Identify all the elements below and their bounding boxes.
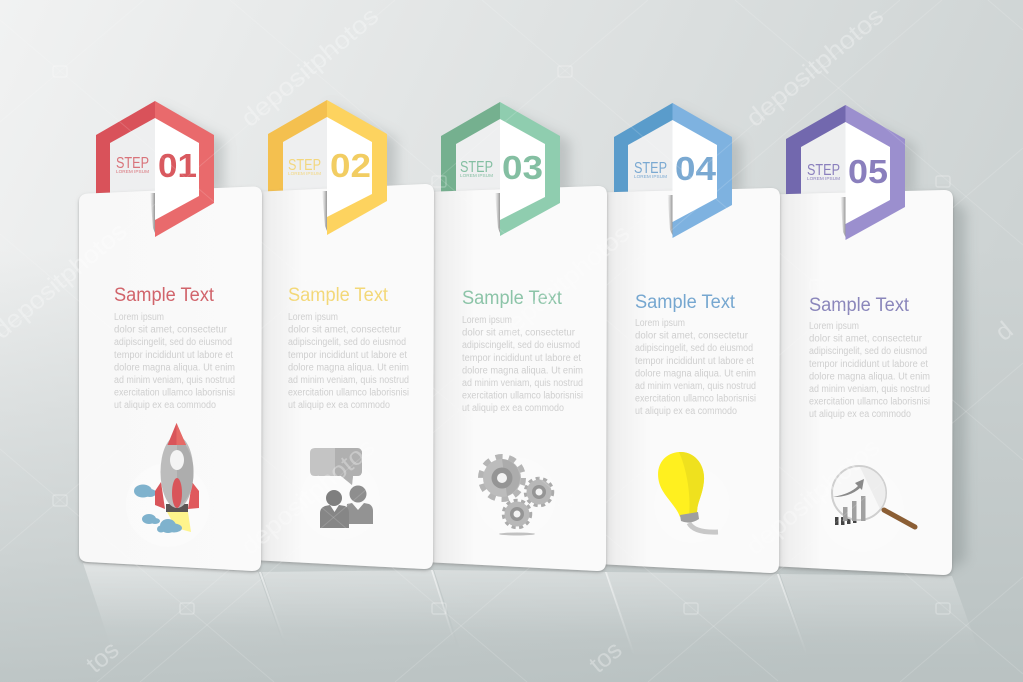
hexagon front half [327, 100, 387, 235]
watermark: tos [81, 636, 124, 679]
body text: ut aliquip ex ea commodo [288, 400, 390, 411]
step label: LOREM IPSUM [634, 174, 667, 179]
step label: STEP [116, 155, 149, 172]
watermark: depositphotos [741, 433, 885, 561]
step label: STEP [634, 160, 667, 177]
body text: exercitation ullamco laborisnisi [288, 388, 409, 398]
body text: adipiscingelit, sed do eiusmod [288, 337, 406, 348]
card [597, 188, 780, 573]
body text [288, 312, 409, 411]
step label: LOREM IPSUM [116, 169, 149, 174]
body text: dolor sit amet, consectetur [462, 328, 576, 338]
body text [114, 312, 235, 411]
step label: STEP [288, 157, 321, 174]
watermark: depositphotos [236, 2, 384, 133]
body text: tempor incididunt ut labore et [288, 350, 407, 361]
body text: Lorem ipsum [809, 321, 859, 332]
hexagon shadow [840, 110, 915, 195]
fold shadow [322, 191, 327, 231]
hexagon shadow [322, 105, 397, 192]
body text: exercitation ullamco laborisnisi [462, 390, 583, 402]
body text: Lorem ipsum [462, 315, 512, 326]
fold shadow [150, 193, 155, 233]
body text: ut aliquip ex ea commodo [462, 403, 564, 414]
panel: step 2 [252, 100, 434, 569]
heading: Sample Text [288, 285, 389, 306]
heading: Sample Text [114, 285, 215, 306]
body text: Lorem ipsum [114, 312, 164, 323]
hexagon shadow [150, 106, 224, 193]
step number: 05 [848, 153, 888, 190]
step label: LOREM IPSUM [460, 173, 493, 178]
panel: step 5 [770, 105, 966, 575]
body text: tempor incididunt ut labore et [635, 356, 754, 367]
body text: dolor sit amet, consectetur [114, 324, 228, 336]
body text: ad minim veniam, quis nostrud [462, 378, 583, 389]
body text: Lorem ipsum [635, 318, 685, 329]
hexagon back half [441, 102, 500, 193]
body text: ad minim veniam, quis nostrud [809, 384, 930, 395]
fold shadow [668, 195, 672, 235]
hexagon front half [672, 103, 732, 238]
body text: adipiscingelit, sed do eiusmod [462, 340, 580, 351]
card [770, 190, 953, 575]
step label: LOREM IPSUM [807, 176, 840, 181]
step label: STEP [807, 162, 840, 179]
body text: dolore magna aliqua. Ut enim [288, 362, 409, 374]
step number: 03 [502, 149, 543, 186]
body text: ut aliquip ex ea commodo [809, 409, 911, 420]
body text: dolore magna aliqua. Ut enim [462, 366, 583, 376]
step label: LOREM IPSUM [288, 171, 321, 176]
watermark: depositphotos [236, 433, 380, 561]
body text: dolor sit amet, consectetur [288, 324, 402, 336]
heading: Sample Text [635, 292, 736, 313]
heading: Sample Text [809, 295, 910, 316]
body text: ad minim veniam, quis nostrud [288, 375, 409, 386]
body text: dolore magna aliqua. Ut enim [635, 368, 756, 380]
body text: dolore magna aliqua. Ut enim [809, 372, 930, 382]
panel: step 3 [424, 102, 607, 571]
floor reflections [83, 563, 982, 660]
icon: light bulb [654, 452, 730, 543]
body text: exercitation ullamco laborisnisi [809, 396, 930, 408]
icon: people with speech bubble [300, 448, 380, 540]
step number: 04 [675, 150, 717, 187]
hexagon front half [155, 101, 214, 237]
step number: 02 [330, 147, 371, 184]
body text: dolor sit amet, consectetur [809, 334, 923, 344]
card [79, 186, 262, 571]
hexagon back half [614, 103, 672, 195]
body text: dolor sit amet, consectetur [635, 330, 749, 342]
watermark: tos [584, 636, 627, 679]
body text: exercitation ullamco laborisnisi [635, 394, 756, 404]
icon: gears [476, 457, 556, 537]
heading: Sample Text [462, 288, 563, 309]
watermark: depositphotos [491, 219, 635, 347]
panel: step 4 [597, 103, 780, 573]
hexagon back half [786, 105, 846, 197]
card [252, 184, 434, 569]
icon: magnifier chart [820, 466, 915, 552]
card [424, 186, 607, 571]
hexagon shadow [495, 107, 570, 195]
body text: dolore magna aliqua. Ut enim [114, 362, 235, 374]
body text: tempor incididunt ut labore et [809, 359, 928, 370]
body text [809, 321, 930, 420]
panel: step 1 [79, 101, 262, 571]
card shadow [790, 196, 966, 570]
body text [635, 318, 756, 417]
fold shadow [495, 193, 500, 233]
body text: ut aliquip ex ea commodo [114, 400, 216, 411]
body text: exercitation ullamco laborisnisi [114, 388, 235, 398]
step number: 01 [158, 147, 197, 184]
body text: adipiscingelit, sed do eiusmod [635, 343, 753, 354]
floor shading [0, 250, 1023, 682]
hexagon back half [96, 101, 155, 194]
hexagon back half [268, 100, 327, 192]
hexagon front half [500, 102, 560, 236]
watermark: d [990, 316, 1019, 347]
body text: ad minim veniam, quis nostrud [114, 375, 235, 386]
fold shadow [840, 197, 846, 237]
body text: adipiscingelit, sed do eiusmod [809, 346, 927, 357]
icon: rocket [126, 423, 210, 547]
body text: Lorem ipsum [288, 312, 338, 323]
body text: adipiscingelit, sed do eiusmod [114, 337, 232, 348]
watermark: depositphotos [741, 2, 889, 133]
hexagon front half [846, 105, 905, 240]
body text: ut aliquip ex ea commodo [635, 406, 737, 417]
body text: ad minim veniam, quis nostrud [635, 381, 756, 392]
step label: STEP [460, 159, 493, 176]
body text: tempor incididunt ut labore et [462, 353, 581, 364]
hexagon shadow [668, 108, 742, 195]
body text: tempor incididunt ut labore et [114, 350, 233, 361]
body text [462, 315, 583, 414]
